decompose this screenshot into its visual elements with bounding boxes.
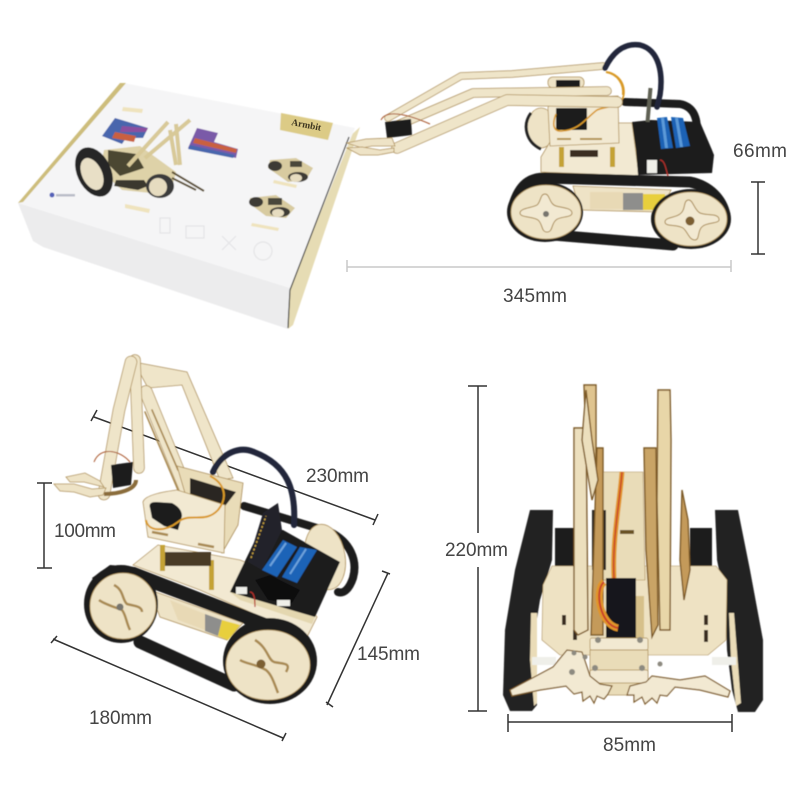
rear track	[625, 102, 697, 130]
height dimension 100mm: 100mm	[54, 521, 116, 542]
front track lower run	[140, 642, 234, 685]
gripper base plates	[590, 637, 648, 695]
chassis side	[573, 186, 671, 212]
board plate edge	[230, 592, 315, 624]
lower arm link	[397, 100, 617, 148]
control cable	[213, 450, 294, 525]
control board	[632, 88, 714, 176]
brass posts	[559, 147, 615, 167]
rear housing panel	[600, 472, 645, 580]
screws	[569, 650, 662, 675]
rear servo	[548, 77, 584, 88]
height dimension 66mm	[733, 141, 787, 254]
control board	[230, 503, 340, 624]
length dimension 180mm: 180mm	[89, 708, 152, 729]
slots	[152, 532, 214, 547]
arm top bracket link	[134, 362, 233, 480]
control cable	[605, 45, 661, 107]
deck slots	[564, 615, 706, 642]
base plate	[541, 123, 639, 176]
printed chassis	[100, 146, 176, 195]
logo plate	[280, 113, 333, 140]
battery right	[671, 117, 690, 148]
orange servo wire	[606, 72, 623, 95]
width dimension 230mm	[91, 410, 378, 525]
brass posts	[160, 545, 214, 590]
servo ribbon wire	[599, 582, 618, 628]
bluetooth mark	[50, 192, 75, 198]
width dimension 85mm	[508, 714, 732, 756]
right claw and gear	[627, 676, 730, 704]
width dimension 145mm: 145mm	[357, 644, 420, 665]
scratch code blocks left	[102, 118, 148, 144]
width dimension 85mm: 85mm	[603, 735, 656, 756]
chassis side	[150, 590, 243, 640]
forearm link	[104, 362, 131, 494]
height dimension 66mm: 66mm	[733, 141, 787, 162]
box front face	[18, 203, 290, 329]
small robot 2	[249, 195, 295, 218]
battery right	[282, 547, 317, 583]
servo housing	[143, 466, 243, 553]
width dimension 230mm: 230mm	[306, 466, 369, 487]
rear wire	[614, 472, 622, 578]
feature icons	[160, 218, 272, 260]
gripper servo	[94, 451, 136, 494]
rear wheel	[527, 108, 555, 148]
servo housing	[548, 72, 624, 146]
printed wheel	[76, 154, 108, 194]
gear motor	[205, 614, 222, 636]
height dimension 100mm	[37, 483, 116, 568]
box top face	[18, 83, 355, 288]
inner wheel left	[530, 613, 537, 706]
micro:bit	[248, 503, 282, 570]
connectors	[236, 587, 247, 594]
arm plates left	[574, 385, 603, 635]
product box	[18, 83, 360, 329]
length dimension 180mm	[51, 636, 286, 741]
rear track	[244, 506, 354, 592]
inner wheel right	[729, 613, 741, 706]
left claw and gear	[510, 650, 612, 703]
box right side flap	[288, 127, 360, 329]
small robot 1	[268, 158, 313, 182]
left track	[503, 510, 553, 711]
side view robot	[347, 45, 731, 249]
servo	[556, 108, 587, 130]
rear wheel	[300, 521, 350, 593]
box left flap	[18, 83, 126, 203]
length dimension 345mm: 345mm	[503, 286, 567, 307]
height dimension 220mm	[445, 386, 508, 711]
battery left	[657, 117, 673, 149]
front track upper run	[92, 565, 313, 672]
battery left	[262, 540, 297, 577]
front view robot	[503, 385, 763, 712]
connector	[647, 160, 657, 173]
width dimension 145mm	[326, 571, 420, 707]
box brand text: Armbit	[290, 118, 323, 134]
servo wire	[146, 476, 224, 529]
label chips	[122, 107, 297, 231]
front left wheel	[84, 565, 158, 643]
front right wheel	[223, 618, 317, 704]
rear servos	[555, 528, 575, 568]
front left wheel	[507, 182, 583, 242]
gripper	[54, 473, 106, 497]
servo wire	[554, 72, 624, 131]
inner arm link	[145, 392, 186, 490]
right track	[715, 510, 763, 712]
printed claw	[172, 172, 204, 191]
three quarter view robot	[54, 360, 354, 704]
height dimension 220mm: 220mm	[445, 540, 508, 561]
printed track	[68, 141, 120, 203]
battery holder	[255, 575, 300, 603]
arm plates right	[644, 390, 690, 637]
base plate	[133, 545, 317, 637]
gripper servo	[385, 119, 412, 138]
front servo	[599, 578, 644, 640]
deck	[542, 566, 727, 655]
scratch code blocks right	[188, 128, 238, 158]
box dark corner edge	[288, 137, 349, 328]
dark servo rear	[656, 490, 670, 540]
pictured robot on box	[68, 120, 204, 203]
servo	[150, 502, 182, 530]
printed right wheel	[146, 174, 174, 198]
front track lower run	[553, 235, 673, 245]
gripper	[347, 138, 395, 155]
vertical arm link	[135, 360, 139, 468]
middle arm link	[398, 91, 607, 125]
printed arm	[128, 120, 190, 166]
front right wheel	[651, 189, 731, 249]
spacers	[532, 657, 556, 665]
printed dark parts	[108, 150, 144, 176]
length dimension 345mm	[347, 260, 731, 307]
front track upper run	[514, 178, 725, 215]
upper arm link	[388, 66, 603, 118]
gear motor	[623, 193, 643, 210]
slots	[557, 138, 602, 140]
